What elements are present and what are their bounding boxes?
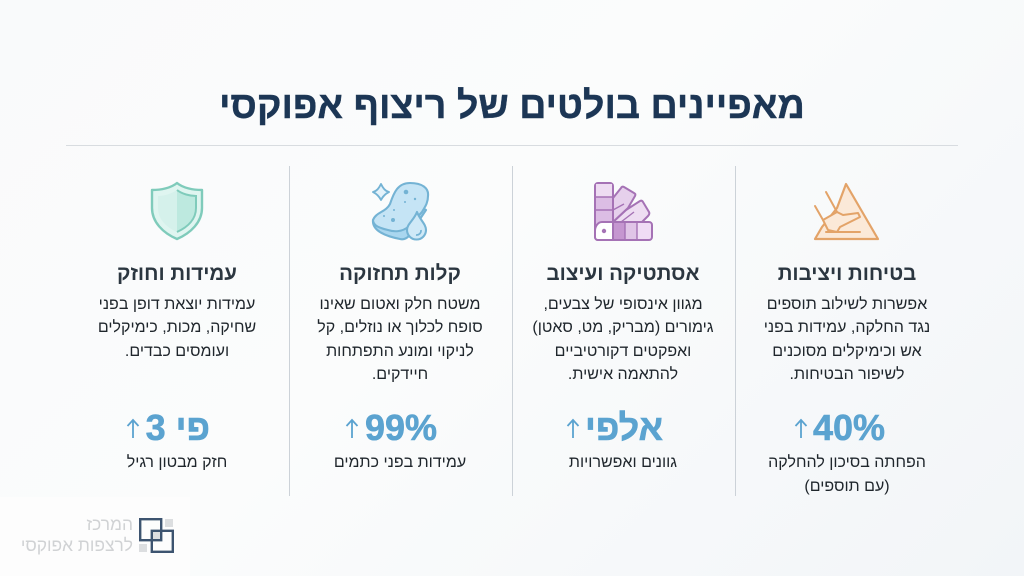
logo text: המרכז <box>86 514 133 534</box>
icon: up arrow <box>566 418 580 438</box>
icon: up arrow <box>346 418 358 438</box>
stat label: גוונים ואפשרויות <box>569 454 677 471</box>
stat label: הפחתה בסיכון להחלקה <box>768 454 926 471</box>
icon: colour swatch fan <box>594 182 653 241</box>
body text: לשיפור הבטיחות. <box>790 366 904 383</box>
icon: shield <box>150 182 204 240</box>
title: מאפיינים בולטים של ריצוף אפוקסי <box>219 84 805 126</box>
logo mark <box>139 518 174 553</box>
heading: בטיחות ויציבות <box>778 262 916 285</box>
body text: שחיקה, מכות, כימיקלים <box>98 319 256 336</box>
body text: משטח חלק ואטום שאינו <box>319 296 481 313</box>
icon: up arrow <box>794 418 808 438</box>
stat label <box>768 454 926 495</box>
panel: safety and stability <box>764 182 930 495</box>
body text: חיידקים. <box>372 366 428 383</box>
logo block <box>0 497 190 576</box>
body text: מגוון אינסופי של צבעים, <box>543 296 703 313</box>
body text: נגד החלקה, עמידות בפני <box>764 319 930 336</box>
logo text: לרצפות אפוקסי <box>21 534 133 554</box>
body text <box>764 296 930 383</box>
stat label: (עם תוספים) <box>804 478 890 495</box>
stat label: עמידות בפני כתמים <box>334 454 466 471</box>
panel: aesthetics and design <box>532 182 714 471</box>
body text: גימורים (מבריק, מט, סאטן) <box>532 319 714 336</box>
body text: להתאמה אישית. <box>568 366 678 383</box>
stat: 99%: 99% <box>365 407 437 448</box>
panel: easy maintenance <box>317 182 483 471</box>
stat label: חזק מבטון רגיל <box>127 454 227 471</box>
body text: ואפקטים דקורטיביים <box>555 343 691 360</box>
heading: עמידות וחוזק <box>117 262 237 285</box>
body text: סופח לכלוך או נוזלים, קל <box>317 319 483 336</box>
stat: thousands: אלפי <box>585 407 663 448</box>
body text <box>317 296 483 383</box>
body text: לניקוי ומונע התפתחות <box>326 343 474 360</box>
body text: אש וכימיקלים מסוכנים <box>772 343 922 360</box>
heading: אסתטיקה ועיצוב <box>547 262 699 285</box>
heading: קלות תחזוקה <box>339 262 461 285</box>
logo text <box>21 514 133 554</box>
icon: slip warning triangle <box>814 182 880 240</box>
body text <box>532 296 714 383</box>
stat: 40%: 40% <box>813 407 885 448</box>
stat: times 3: פי 3 <box>146 407 210 448</box>
body text: ועומסים כבדים. <box>125 343 229 360</box>
icon: sponge with sparkle and drop <box>372 182 430 240</box>
body text <box>98 296 256 360</box>
panel: durability and strength <box>98 182 256 471</box>
body text: עמידות יוצאת דופן בפני <box>99 296 255 313</box>
body text: אפשרות לשילוב תוספים <box>767 296 927 313</box>
icon: up arrow <box>126 418 140 438</box>
